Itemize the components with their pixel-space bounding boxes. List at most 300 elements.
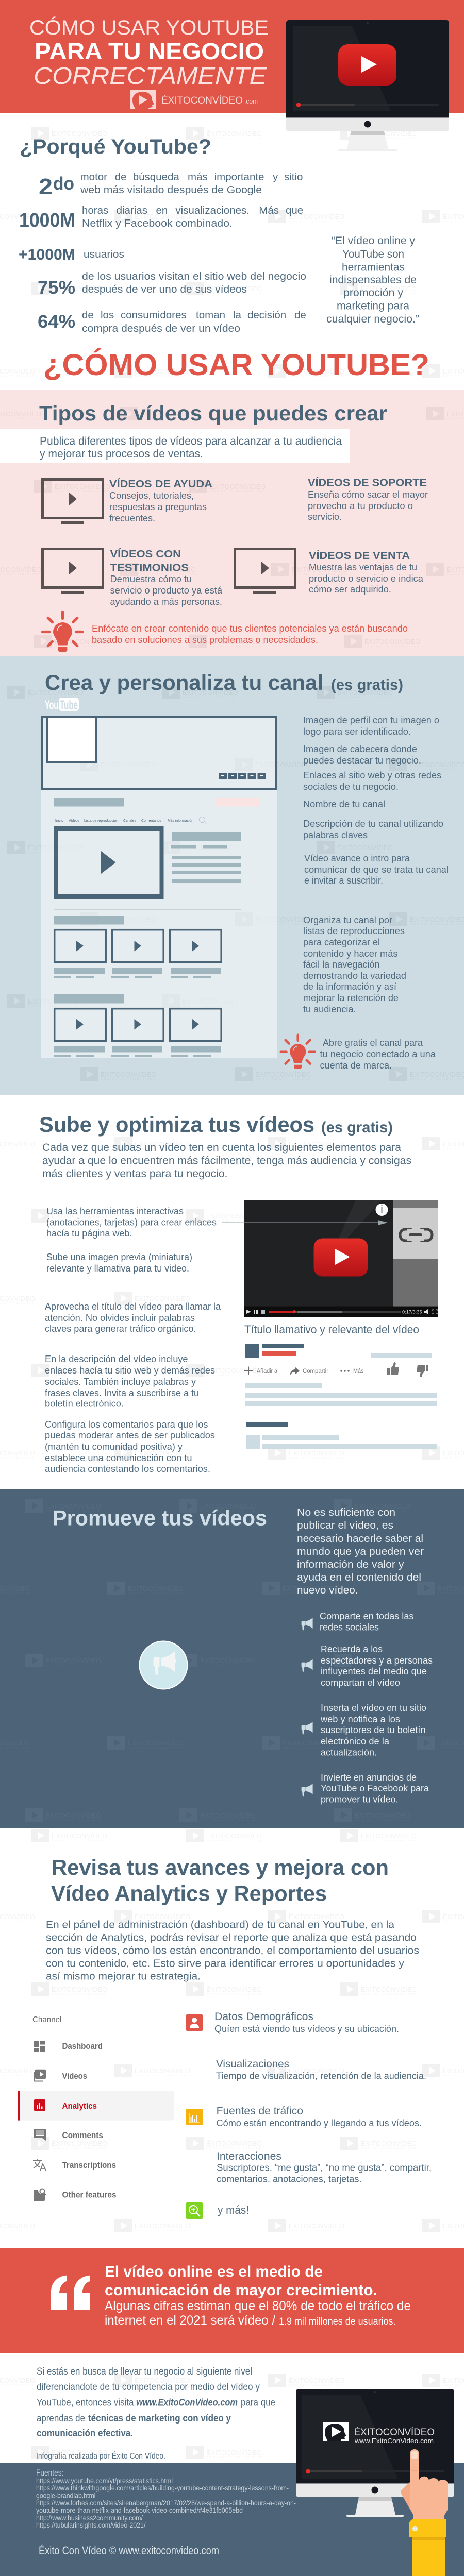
text: www.exitoconvideo.com: [27, 1005, 82, 1008]
tips list: Sube una imagen previa (miniatura): [46, 1252, 192, 1262]
text: www.exitoconvideo.com: [51, 2456, 106, 2459]
tip text: basado en soluciones a sus problemas o necesidades.: [92, 634, 318, 645]
tips list: boletín electrónico.: [45, 1398, 124, 1409]
icon: video screen: [42, 479, 103, 524]
text: ÉXITOCONVÍDEO: [140, 410, 196, 418]
stat: 64%: de: [82, 309, 94, 321]
text: ÉXITOCONVÍDEO: [206, 1986, 262, 1993]
title: CORRECTAMENTE: [34, 62, 267, 89]
item: recuerda: espectadores y a personas: [321, 1655, 433, 1666]
annotations: tu audiencia.: [303, 1004, 356, 1014]
text: ÉXITOCONVÍDEO: [200, 1657, 256, 1665]
text: www.exitoconvideo.com: [182, 851, 237, 854]
text: www.exitoconvideo.com: [409, 923, 464, 926]
menu item: dashboard: Dashboard: [62, 2041, 103, 2051]
statement: 1.9 mil millones de usuarios.: [279, 2316, 396, 2327]
annotations: sociales de tu negocio.: [303, 782, 399, 792]
text: ÉXITOCONVÍDEO: [206, 130, 262, 138]
channel page mockup: [41, 716, 277, 1058]
annotations: [303, 715, 449, 1014]
annotations: fácil la navegación: [303, 959, 379, 970]
card: vídeos de venta: [309, 550, 424, 595]
stat: 1000M: en: [156, 205, 168, 216]
text: ÉXITOCONVÍDEO: [52, 1832, 107, 1840]
card: vídeos de ayuda: frecuentes.: [109, 513, 155, 523]
text: www.exitoconvideo.com: [206, 137, 261, 140]
text: www.exitoconvideo.com: [337, 851, 392, 854]
tip text: [320, 1038, 436, 1071]
text: www.exitoconvideo.com: [54, 645, 109, 648]
stat: 2do: y: [273, 171, 278, 183]
section: sube y optimiza: [39, 1112, 438, 1474]
text: ÉXITOCONVÍDEO: [206, 1367, 262, 1375]
footer copyright: Éxito Con Vídeo © www.exitoconvideo.com: [39, 2544, 219, 2557]
stat: 75%: 75%: [38, 278, 75, 298]
YouTube logo: You: [45, 698, 58, 713]
stat: 64%: [38, 309, 306, 334]
text: www.exitoconvideo.com: [255, 1078, 310, 1081]
video page wireframe: [244, 1344, 437, 1449]
text: www.exitoconvideo.com: [51, 1374, 106, 1377]
text: ÉXITOCONVÍDEO: [410, 761, 464, 769]
heading: Vídeo Analytics y Reportes: [51, 1882, 327, 1906]
item: interacciones: comentarios, anotaciones, tarjetas.: [217, 2174, 362, 2184]
intro text: publicar el vídeo, es: [297, 1519, 393, 1531]
menu item: comments: Comments: [62, 2130, 103, 2140]
text: www.exitoconvideo.com: [100, 1078, 155, 1081]
card: vídeos con testimonios: servicio o producto ya está: [110, 585, 223, 596]
stat: 64%: compra después de ver un vídeo: [82, 323, 240, 334]
text: ÉXITOCONVÍDEO: [52, 2140, 107, 2147]
text: www.exitoconvideo.com: [134, 1302, 189, 1305]
stat: 2do: búsqueda: [133, 171, 179, 183]
text: www.exitoconvideo.com: [206, 1993, 261, 1996]
stat: 64%: toman: [196, 309, 225, 321]
text: www.exitoconvideo.com: [51, 137, 106, 140]
stat: +1000M: [19, 246, 124, 263]
text: ÉXITOCONVÍDEO: [289, 213, 344, 221]
text: ÉXITOCONVÍDEO: [361, 285, 417, 293]
sources: https://tubularinsights.com/video-2021/: [36, 2521, 145, 2529]
text: www.exitoconvideo.com: [140, 417, 195, 420]
annotations: palabras claves: [303, 830, 368, 840]
tips list: (anotaciones, tarjetas) para crear enlaces: [46, 1217, 217, 1227]
header logo: ÉXITOCONVÍDEO: [161, 95, 243, 106]
tips list: (mantén tu comunidad positiva) y: [45, 1442, 183, 1452]
icon: bar chart: [186, 2109, 203, 2125]
statement: internet en el 2021 será vídeo /: [105, 2313, 275, 2328]
text: ÉXITOCONVÍDEO: [289, 1140, 344, 1148]
stat: 64%: los: [101, 309, 114, 321]
item: inserta: Inserta el vídeo en tu sitio: [321, 1702, 426, 1713]
item: inserta: actualización.: [321, 1747, 377, 1758]
text: www.exitoconvideo.com: [360, 1993, 416, 1996]
text: www.exitoconvideo.com: [354, 1510, 409, 1513]
card: vídeos de venta: VÍDEOS DE VENTA: [309, 550, 410, 562]
YouTube logo: Tube: [60, 698, 78, 713]
text: www.exitoconvideo.com: [51, 292, 106, 295]
item: recuerda: [321, 1643, 433, 1688]
text: ÉXITOCONVÍDEO: [206, 2140, 262, 2147]
text: ÉXITOCONVÍDEO: [200, 1502, 256, 1510]
stat: 2do: sitio: [284, 171, 303, 183]
text: www.exitoconvideo.com: [255, 923, 310, 926]
text: ÉXITOCONVÍDEO: [45, 1811, 101, 1819]
item: inserta: [320, 1702, 426, 1758]
tip text: Abre gratis el canal para: [323, 1038, 423, 1048]
item: invierte: YouTube o Facebook para: [321, 1783, 429, 1793]
panel: tipos de vídeos: [0, 401, 428, 652]
text: ÉXITOCONVÍDEO: [361, 130, 417, 138]
stat: 64%: 64%: [38, 312, 75, 332]
text: www.exitoconvideo.com: [291, 573, 346, 576]
text: www.exitoconvideo.com: [409, 1078, 464, 1081]
card: vídeos con testimonios: TESTIMONIOS: [110, 563, 189, 574]
text: www.exitoconvideo.com: [51, 1993, 106, 1996]
text: ÉXITOCONVÍDEO: [337, 689, 393, 697]
annotations: para categorizar el: [303, 937, 380, 947]
text: ÉXITOCONVÍDEO: [289, 2067, 344, 2075]
text: www.exitoconvideo.com: [360, 1839, 416, 1842]
item: invierte: Invierte en anuncios de: [321, 1772, 417, 1783]
tips list: frases claves. Invita a suscribirse a tu: [45, 1388, 199, 1398]
text: ÉXITOCONVÍDEO: [289, 1449, 344, 1457]
intro band: y mejorar tus procesos de ventas.: [40, 447, 203, 460]
text: ÉXITOCONVÍDEO: [410, 916, 464, 923]
annotations: mejorar la retención de: [303, 993, 399, 1003]
stat: 2do: más: [188, 171, 208, 183]
text: www.exitoconvideo.com: [206, 1374, 261, 1377]
call to action text: [37, 2366, 275, 2439]
item: comparte: [320, 1611, 413, 1633]
heading: Revisa tus avances y mejora con: [52, 1855, 389, 1879]
paragraph: En el pánel de administración (dashboard) de tu canal en YouTube, en la: [46, 1919, 395, 1931]
text: ÉXITOCONVÍDEO: [28, 844, 84, 852]
tips list: relevante y llamativa para tu video.: [46, 1263, 189, 1274]
item: fuentes de tráfico: Fuentes de tráfico: [217, 2105, 303, 2117]
text: ÉXITOCONVÍDEO: [52, 1212, 107, 1220]
card: vídeos de ayuda: [109, 478, 212, 523]
text: www.exitoconvideo.com: [288, 2384, 343, 2387]
statement: [105, 2263, 411, 2328]
text: ÉXITOCONVÍDEO: [355, 1502, 410, 1510]
annotations: Nombre de tu canal: [303, 799, 385, 809]
channel page mockup: Comentarios: [141, 819, 161, 823]
stat: 75%: de los usuarios visitan el sitio web del negocio: [82, 270, 306, 282]
text: www.exitoconvideo.com: [51, 1839, 106, 1842]
text: www.exitoconvideo.com: [134, 1456, 189, 1460]
sources: https://www.youtube.com/yt/press/statistics.html: [36, 2477, 173, 2485]
call to action text: para que: [241, 2398, 275, 2409]
intro text: No es suficiente con: [297, 1506, 395, 1518]
call to action text: diferenciandote de tu competencia por medio del vídeo y: [37, 2382, 260, 2393]
intro paragraph: [42, 1142, 411, 1180]
paragraph: así mismo mejorar tu estrategia.: [46, 1971, 201, 1982]
item: datos demográficos: Datos Demográficos: [214, 2010, 313, 2023]
menu item: analytics (active): Analytics: [62, 2101, 97, 2111]
text: ÉXITOCONVÍDEO: [289, 1913, 344, 1921]
tips list: En la descripción del vídeo incluye: [45, 1354, 188, 1364]
text: ÉXITOCONVÍDEO: [337, 844, 393, 852]
item: comparte: redes sociales: [320, 1622, 379, 1633]
text: www.exitoconvideo.com: [127, 1747, 183, 1750]
text: ÉXITOCONVÍDEO: [52, 285, 107, 293]
sidebar menu: Channel: [32, 2015, 61, 2024]
icon: user: [186, 2014, 203, 2031]
menu item: other features: Other features: [62, 2190, 117, 2200]
item: interacciones: [217, 2150, 432, 2184]
text: www.exitoconvideo.com: [182, 696, 237, 699]
heading: [51, 1855, 389, 1906]
annotations: Imagen de perfil con tu imagen o: [303, 715, 439, 725]
text: ÉXITOCONVÍDEO: [28, 997, 84, 1005]
quote: YouTube son: [342, 248, 404, 260]
text: ÉXITOCONVÍDEO: [135, 1449, 190, 1457]
logo on screen: www.ExitoConVideo.com: [354, 2437, 434, 2445]
quote: “El vídeo online y: [332, 235, 415, 247]
monitor illustration with logo: [296, 2389, 454, 2517]
text: www.exitoconvideo.com: [54, 490, 109, 493]
menu item: transcriptions: [33, 2159, 116, 2171]
text: www.exitoconvideo.com: [288, 2074, 343, 2077]
item: inserta: electrónico de la: [321, 1736, 390, 1747]
text: ÉXITOCONVÍDEO: [289, 2377, 344, 2384]
call to action text: comunicación efectiva.: [37, 2428, 133, 2439]
text: www.exitoconvideo.com: [282, 1592, 337, 1595]
stat: 2do: motor: [80, 171, 107, 183]
text: www.exitoconvideo.com: [100, 768, 155, 771]
text: www.exitoconvideo.com: [45, 1510, 100, 1513]
card: vídeos de venta: producto o servicio e indica: [309, 573, 424, 584]
icon: megaphone circle: [139, 1641, 188, 1689]
text: www.exitoconvideo.com: [337, 696, 392, 699]
video page wireframe: Añadir a: [257, 1368, 278, 1375]
stat: 1000M: 1000M: [19, 210, 75, 231]
text: www.exitoconvideo.com: [209, 645, 264, 648]
channel page mockup: Inicio: [55, 819, 63, 823]
icon: megaphone: [302, 1722, 313, 1734]
stat: +1000M: +1000M: [19, 246, 75, 263]
sources: youtube-more-than-netflix-and-facebook-video-combined/#4e31fb005ebd: [36, 2506, 243, 2514]
text: www.exitoconvideo.com: [127, 1592, 183, 1595]
tips list: claves para generar tráfico orgánico.: [45, 1324, 196, 1334]
text: ÉXITOCONVÍDEO: [135, 1295, 190, 1302]
text: www.exitoconvideo.com: [209, 490, 264, 493]
tips list: hacía tu página web.: [46, 1228, 132, 1239]
annotations: comunicar de que se trata tu canal: [304, 865, 449, 875]
item: inserta: suscriptores de tu boletín: [321, 1724, 426, 1735]
text: www.exitoconvideo.com: [409, 768, 464, 771]
stat: 2do: do: [53, 174, 74, 194]
annotations: logo para ser identificado.: [303, 726, 411, 737]
logo on screen: [323, 2422, 435, 2445]
credit: Infografía realizada por Éxito Con Vídeo.: [36, 2451, 165, 2461]
text: ÉXITOCONVÍDEO: [206, 1832, 262, 1840]
text: ÉXITOCONVÍDEO: [55, 638, 110, 646]
text: ÉXITOCONVÍDEO: [283, 1739, 338, 1747]
item: visualizaciones: [216, 2058, 426, 2081]
logo on screen: ÉXITOCONVÍDEO: [354, 2426, 435, 2438]
text: ÉXITOCONVÍDEO: [200, 1811, 256, 1819]
heading: Sube y optimiza tus vídeos: [39, 1112, 314, 1137]
tips list: Aprovecha el título del vídeo para llamar la: [45, 1301, 221, 1312]
text: ÉXITOCONVÍDEO: [361, 1832, 417, 1840]
text: ÉXITOCONVÍDEO: [210, 483, 266, 490]
section: analytics: [18, 1855, 432, 2219]
card: vídeos de soporte: provecho a tu producto o: [308, 501, 413, 511]
quote: [326, 235, 419, 325]
text: www.exitoconvideo.com: [51, 1219, 106, 1223]
text: www.exitoconvideo.com: [134, 2384, 189, 2387]
icon: megaphone: [302, 1784, 313, 1796]
tips list: puedas moderar antes de ser publicados: [45, 1430, 215, 1440]
video page wireframe: Compartir: [303, 1368, 328, 1375]
text: ÉXITOCONVÍDEO: [45, 1657, 101, 1665]
call to action text: técnicas de marketing con vídeo y: [88, 2413, 231, 2424]
text: ÉXITOCONVÍDEO: [255, 761, 311, 769]
icon: quotation mark: [51, 2276, 90, 2310]
text: ÉXITOCONVÍDEO: [28, 689, 84, 697]
annotations: contenido y hacer más: [303, 948, 398, 959]
stat: 64%: decisión: [247, 309, 286, 321]
sources: https://www.thinkwithgoogle.com/articles/building-youtube-content-strategy-lessons-from-: [36, 2484, 289, 2492]
monitor illustration with YouTube play button: [286, 20, 449, 151]
paragraph: sección de Analytics, podrás revisar el reporte que analiza que está pasando: [46, 1932, 417, 1944]
panel: quote band: [51, 2263, 411, 2328]
text: ÉXITOCONVÍDEO: [183, 689, 238, 697]
text: www.exitoconvideo.com: [45, 1664, 100, 1667]
item: interacciones: Interacciones: [217, 2150, 281, 2162]
stat: 75%: [38, 270, 306, 298]
item: recuerda: Recuerda a los: [321, 1643, 383, 1654]
card: vídeos con testimonios: VÍDEOS CON: [110, 548, 181, 560]
channel page mockup: Más información: [168, 819, 193, 823]
text: www.exitoconvideo.com: [200, 1819, 255, 1822]
hand pointing: [401, 2449, 448, 2576]
text: www.exitoconvideo.com: [134, 2074, 189, 2077]
heading: Cómo usar YouTube: ¿CÓMO USAR YOUTUBE?: [43, 348, 429, 382]
text: ÉXITOCONVÍDEO: [101, 761, 156, 769]
text: www.exitoconvideo.com: [200, 1664, 255, 1667]
stat: 64%: consumidores: [121, 309, 187, 321]
intro text: [297, 1506, 424, 1596]
annotations: puedes destacar tu negocio.: [303, 755, 421, 766]
text: ÉXITOCONVÍDEO: [52, 1367, 107, 1375]
header logo: .com: [244, 97, 258, 105]
call to action text: Si estás en busca de llevar tu negocio al siguiente nivel: [37, 2366, 252, 2377]
item: interacciones: Suscriptores, “me gusta”, “no me gusta”, compartir,: [217, 2163, 432, 2173]
text: ÉXITOCONVÍDEO: [135, 2067, 190, 2075]
stat: 1000M: [19, 205, 303, 231]
stat: 64%: la: [233, 309, 242, 321]
text: www.exitoconvideo.com: [206, 1839, 261, 1842]
annotations: e invitar a suscribir.: [304, 875, 383, 886]
text: www.exitoconvideo.com: [360, 292, 416, 295]
card: vídeos de ayuda: Consejos, tutoriales,: [109, 490, 194, 501]
icon: video screen: [42, 549, 103, 594]
text: ÉXITOCONVÍDEO: [52, 1986, 107, 1993]
text: ÉXITOCONVÍDEO: [135, 2377, 190, 2384]
tips list: Configura los comentarios para que los: [45, 1419, 208, 1430]
menu item: dashboard: [34, 2041, 103, 2052]
text: www.exitoconvideo.com: [100, 923, 155, 926]
text: www.exitoconvideo.com: [206, 292, 261, 295]
title: PARA TU NEGOCIO: [35, 38, 264, 64]
item: fuentes de tráfico: [217, 2105, 422, 2128]
panel: crea y personaliza tu canal: [41, 670, 449, 1071]
text: www.exitoconvideo.com: [200, 1510, 255, 1513]
card: vídeos de soporte: VÍDEOS DE SOPORTE: [308, 477, 427, 488]
stat: 1000M: Más: [259, 205, 279, 216]
text: ÉXITOCONVÍDEO: [135, 2222, 190, 2230]
stat: 64%: de: [294, 309, 306, 321]
text: www.exitoconvideo.com: [206, 2147, 261, 2150]
video title: Título llamativo y relevante del vídeo: [244, 1323, 419, 1336]
video player: 0:17/3:35: [402, 1310, 422, 1315]
annotations: listas de reproducciones: [303, 926, 405, 936]
tips list: [45, 1206, 221, 1474]
quote: promoción y: [343, 287, 403, 299]
menu item: other features: [34, 2189, 117, 2201]
card: vídeos con testimonios: ayudando a más personas.: [110, 597, 222, 607]
intro band: Publica diferentes tipos de vídeos para alcanzar a tu audiencia: [40, 435, 342, 447]
text: ÉXITOCONVÍDEO: [355, 1811, 410, 1819]
video player: [244, 1200, 438, 1317]
text: www.exitoconvideo.com: [134, 1920, 189, 1923]
menu item: comments: [34, 2129, 103, 2141]
statement: El vídeo online es el medio de: [105, 2263, 323, 2280]
annotations: de la información y así: [303, 981, 396, 992]
text: www.exitoconvideo.com: [288, 2229, 343, 2232]
text: www.exitoconvideo.com: [27, 851, 82, 854]
text: www.exitoconvideo.com: [255, 768, 310, 771]
heading: Crea y personaliza tu canal: [45, 670, 323, 694]
panel: promueve tus vídeos: [53, 1506, 433, 1805]
menu item: analytics (active): [18, 2091, 174, 2121]
stat: 1000M: horas: [82, 205, 108, 216]
paragraph: [46, 1919, 419, 1982]
item: inserta: web y notifica a los: [320, 1714, 400, 1724]
card: vídeos de ayuda: VÍDEOS DE AYUDA: [109, 478, 212, 490]
intro text: nuevo vídeo.: [297, 1584, 358, 1596]
card: vídeos de soporte: [308, 477, 428, 522]
text: www.exitoconvideo.com: [134, 1147, 189, 1150]
text: ÉXITOCONVÍDEO: [255, 1071, 311, 1078]
statement: Algunas cifras estiman que el 80% de todo el tráfico de: [105, 2299, 411, 2313]
statement: comunicación de mayor crecimiento.: [105, 2282, 377, 2299]
text: ÉXITOCONVÍDEO: [135, 1140, 190, 1148]
call to action text: www.ExitoConVideo.com: [136, 2398, 238, 2409]
text: ÉXITOCONVÍDEO: [364, 638, 420, 646]
stat: 2do: 2: [39, 174, 53, 199]
annotations: Descripción de tu canal utilizando: [303, 819, 443, 829]
title: [29, 16, 269, 89]
text: ÉXITOCONVÍDEO: [135, 1913, 190, 1921]
tip text: [92, 623, 408, 645]
title: CÓMO USAR YOUTUBE: [29, 16, 269, 39]
card: vídeos de venta: cómo ser adquirido.: [309, 584, 391, 595]
intro paragraph: ayudar a que lo encuentren más fácilmente, tenga más audiencia y consigas: [42, 1155, 411, 1167]
text: www.exitoconvideo.com: [182, 1005, 237, 1008]
quote: herramientas: [342, 262, 405, 273]
icon: light bulb: [281, 1035, 315, 1069]
channel page mockup: Canales: [123, 819, 136, 823]
text: ÉXITOCONVÍDEO: [183, 844, 238, 852]
icon: megaphone: [302, 1618, 313, 1630]
paragraph: con tu contenido, etc. Esto sirve para identificar errores u oportunidades y: [46, 1958, 405, 1970]
annotations: Imagen de cabecera donde: [303, 744, 417, 754]
tips list: establece una comunicación con tu: [45, 1453, 192, 1463]
